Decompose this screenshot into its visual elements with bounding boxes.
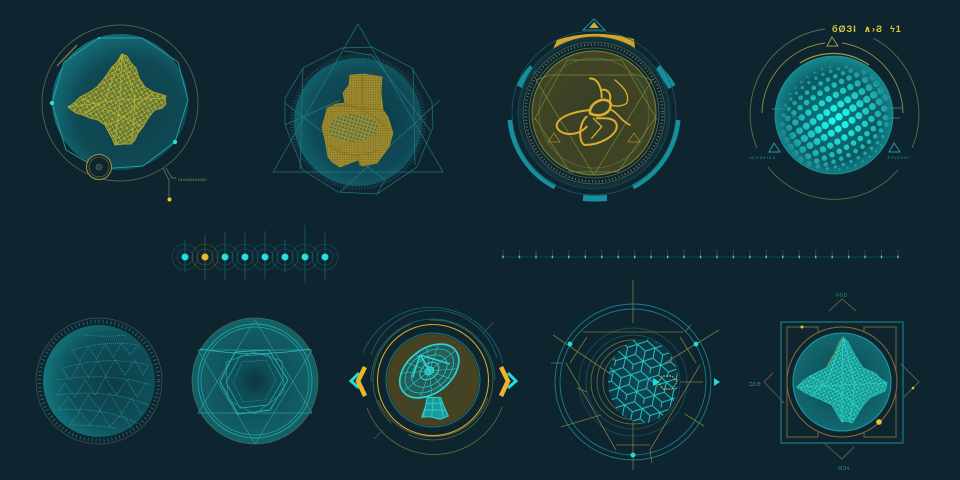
concentric yellow rings (579, 328, 687, 436)
sphere (608, 339, 678, 423)
yellow filament (557, 78, 630, 145)
ruler scale (502, 250, 898, 258)
yellow ring (787, 327, 897, 437)
yellow lattice cluster (658, 376, 677, 389)
hex-cube lattice (608, 339, 678, 423)
panel: yellow filament circle with teal segments (510, 19, 678, 198)
tick ring (36, 318, 162, 444)
terrain wireframe (68, 54, 166, 145)
small target circle (86, 154, 112, 180)
panel: radio telescope dish (351, 307, 516, 454)
sphere (775, 56, 893, 174)
small triangle marker (583, 19, 605, 30)
teal ring (386, 333, 480, 427)
right small label: ∧∧ı∧o∧ı (887, 155, 909, 160)
outer arcs (363, 307, 503, 454)
panel: hexagram disc (192, 318, 318, 444)
cyan nodes and arrow (568, 342, 720, 457)
outer ring (42, 25, 198, 181)
chevrons right (501, 367, 516, 396)
row of radar nodes (172, 225, 338, 283)
callout line with dot and label (163, 168, 207, 202)
star lines (198, 320, 312, 444)
inner geometry (534, 58, 657, 175)
yellow arc accent (57, 45, 77, 66)
olive disc (532, 51, 656, 175)
bottom label: ΘƆч (838, 466, 850, 472)
teal disc (43, 325, 155, 437)
top yellow arc (553, 34, 635, 49)
chevrons (764, 299, 919, 459)
teal square (781, 322, 903, 443)
chevrons left (351, 367, 365, 396)
callout line with dot and label: ıoıoooıoıooı (178, 177, 207, 182)
dish wireframe (390, 333, 469, 419)
panel: halftone sphere (749, 24, 919, 199)
teal disc (192, 318, 318, 444)
yellow ring (378, 324, 488, 436)
polygon outline (52, 38, 188, 169)
yellow side brackets (787, 327, 896, 437)
nested hexagons (220, 350, 288, 414)
panel: dotted triangle globe (36, 318, 162, 444)
top label: FSD (836, 293, 848, 299)
concentric rings (518, 37, 670, 189)
left small label: ıoı∧o∧ı∧∧ (749, 155, 776, 160)
gear tick ring (292, 56, 424, 188)
halftone dot rows (764, 45, 911, 190)
triangle and polygon frame (273, 24, 443, 194)
panel: teal terrain mesh in square frame (749, 293, 919, 472)
panel: hex-cube sphere with targeting lines (551, 280, 720, 470)
header glyph label: бØЗI ∧›Ϩ ϟ1 (832, 24, 902, 34)
outer and inner arcs (750, 29, 919, 199)
cyan node dots (50, 37, 177, 144)
triangles and small labels (769, 37, 902, 152)
outer rings (555, 304, 711, 460)
panel: knee joint mesh in triangle frame (273, 24, 443, 194)
targeting lines (551, 280, 719, 470)
teal outer segments (510, 31, 678, 198)
olive disc (387, 334, 479, 426)
teal disc (793, 333, 891, 431)
inner rings (198, 324, 312, 438)
dotted lattice (57, 335, 152, 428)
teal disc (52, 34, 188, 170)
left label: ƆƐΘ (749, 382, 761, 388)
panel: yellow terrain mesh in circular frame (42, 25, 207, 202)
yellow dots (800, 326, 914, 425)
knee wireframe (322, 74, 393, 167)
teal disc (294, 58, 422, 186)
terrain wireframe (797, 337, 887, 423)
